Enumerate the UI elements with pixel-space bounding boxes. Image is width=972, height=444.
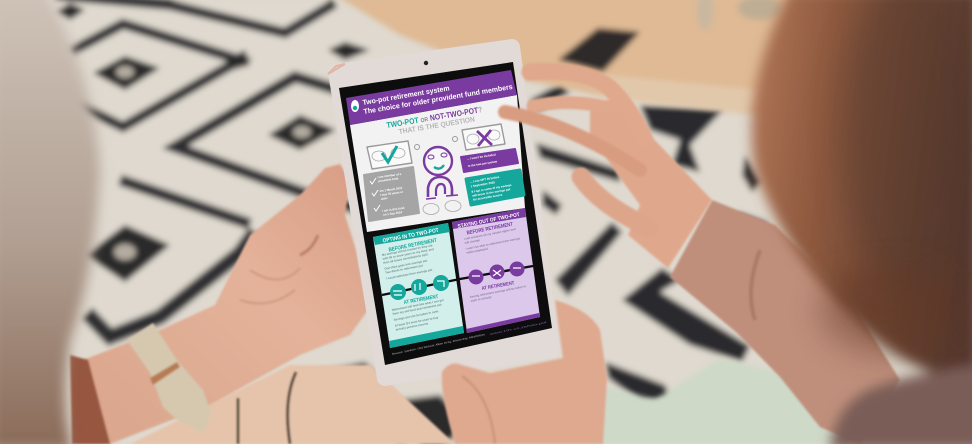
panel: opting in to two-pot: Retirement will look like what I can get xyxy=(391,298,444,312)
grey checklist box: provident fund xyxy=(378,176,399,183)
panel: opting in to two-pot: OPTING IN TO TWO-POT xyxy=(382,228,440,244)
panel: opting in to two-pot: At least 2/3 must be used to buy xyxy=(394,315,439,328)
footer note: Source: Sanlam, Old Mutual, Allan Gray, Discovery, Alexforbes xyxy=(391,332,486,356)
panel: staying out of two-pot: while employed xyxy=(465,247,488,255)
panel: staying out of two-pot: will change xyxy=(463,238,481,245)
purple speech box: in the two-pot system xyxy=(468,159,498,168)
blurred hair, left foreground xyxy=(0,0,100,444)
panel: staying out of two-pot: STAYING OUT OF TWO-POT xyxy=(457,212,521,230)
teal speech box xyxy=(466,170,524,205)
shoulder xyxy=(830,365,972,444)
teal speech box: for accessible access xyxy=(473,193,503,202)
tablet frame xyxy=(336,47,552,378)
panel: opting in to two-pot: then all future contributions split xyxy=(383,252,428,265)
icon: drop xyxy=(351,100,359,112)
panel: opting in to two-pot: with 55 or more years to my fund, and xyxy=(381,247,434,261)
grey checklist box: I am in this fund xyxy=(382,206,405,213)
panel heading xyxy=(373,223,450,245)
panel: opting in to two-pot: My savings will be treated as they are xyxy=(381,243,433,257)
grey checklist box xyxy=(364,167,419,221)
sleeve cuff left xyxy=(70,355,110,444)
panel: opting in to two-pot: from my old fund and retirement pot xyxy=(392,302,442,316)
white page xyxy=(350,95,525,232)
camera xyxy=(424,61,428,65)
panel: staying out of two-pot: I will maintain all my vested rights and xyxy=(463,227,516,241)
panel: opting in to two-pot: BEFORE RETIREMENT xyxy=(388,238,438,253)
question heading: TWO-POT OR NOT-TWO-POT? xyxy=(386,105,483,130)
left hand and forearm xyxy=(78,164,368,444)
teal speech box: 1 September 2025 xyxy=(470,180,496,188)
bubble: cross xyxy=(452,124,505,150)
panel: opting in to two-pot: annuity pension income xyxy=(395,321,429,332)
bubble: tick xyxy=(367,141,420,169)
header band xyxy=(346,70,517,125)
panel: opting in to two-pot xyxy=(373,223,464,348)
question heading: THAT IS THE QUESTION xyxy=(398,114,475,136)
panel: opting in to two-pot: AT RETIREMENT xyxy=(403,294,439,306)
panel: opting in to two-pot: I could withdraw from savings pot xyxy=(386,268,433,281)
sweater sleeve xyxy=(670,200,900,444)
heading: Two-pot retirement system xyxy=(362,83,450,107)
grey checklist box: older xyxy=(380,196,389,201)
tablet xyxy=(328,47,552,378)
pointing hand xyxy=(505,71,712,268)
panel: staying out of two-pot: cash or annuity xyxy=(470,295,492,303)
wooden table with phone xyxy=(335,0,800,115)
timeline with icons xyxy=(382,262,533,300)
icon: phone on table xyxy=(558,28,640,72)
rug right part xyxy=(530,82,768,402)
wrist strap xyxy=(127,323,211,433)
beige clothing xyxy=(130,365,455,444)
panel: staying out of two-pot: BEFORE RETIREMENT xyxy=(466,221,514,236)
panel: staying out of two-pot xyxy=(452,208,540,333)
lower right hand holding tablet xyxy=(442,300,607,444)
grey checklist box: on 1 Sep 2024 xyxy=(383,210,403,217)
purple speech box xyxy=(461,149,518,172)
purple speech box: ... I won't be included xyxy=(467,152,496,161)
figure: face and body xyxy=(423,147,461,214)
grey checklist box: I was 55 years or xyxy=(380,190,404,197)
panel: opting in to two-pot: Savings pot can be taken in cash xyxy=(393,309,439,322)
header band: The choice for older provident fund members xyxy=(363,82,513,116)
blurred head, right foreground xyxy=(752,0,972,444)
teal speech box: If I opt in some of my savings xyxy=(471,183,512,194)
teal speech box: will move to the savings pot xyxy=(471,187,511,198)
grey checklist box: On 1 March 2021 xyxy=(379,186,403,193)
panel: opting in to two-pot: One-third goes into savings pot xyxy=(384,258,428,271)
tablet: www.10x.co.za/two-pot xyxy=(489,320,548,336)
green trousers xyxy=(597,358,860,444)
panel: staying out of two-pot: I won't be able to withdraw from savings xyxy=(465,236,521,251)
panel: staying out of two-pot: AT RETIREMENT xyxy=(481,280,515,292)
teal speech box: ... I can OPT IN before xyxy=(469,175,500,184)
panel: staying out of two-pot: Saving retirement savings will be taken in xyxy=(469,284,527,299)
buckle xyxy=(150,362,180,385)
grey checklist box: I am member of a xyxy=(377,172,402,179)
panel: opting in to two-pot: Two-thirds to retirement pot xyxy=(385,263,423,275)
screen xyxy=(339,62,552,365)
